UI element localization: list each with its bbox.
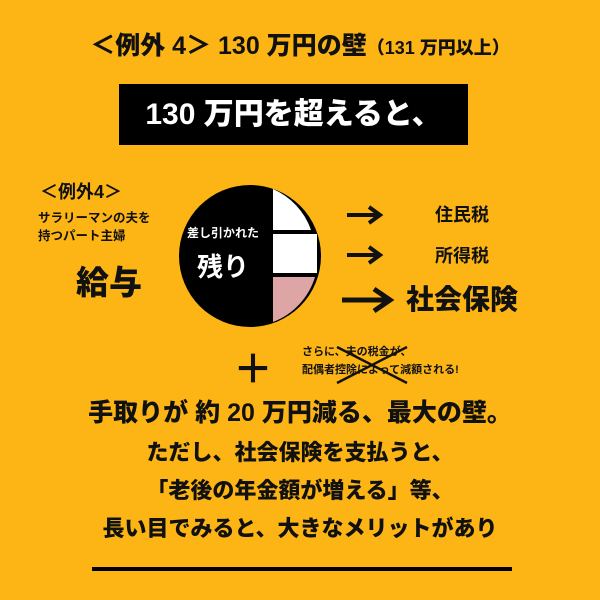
arrows and taxes (342, 205, 518, 315)
arrow 1 (347, 205, 384, 225)
text: housewife: サラリーマンの夫を (38, 211, 151, 225)
text: income tax: 所得税 (435, 246, 489, 266)
label: exception: ＜例外4＞ (40, 182, 122, 202)
conclusion text: 長い目でみると、大きなメリットがあり (102, 516, 498, 541)
arrow 2 (347, 245, 384, 265)
plus: ＋ (233, 348, 273, 392)
banner: 130 万円を超えると、 (145, 98, 442, 131)
note with cross: さらに、夫の税金が、 (302, 346, 411, 358)
note with cross (302, 345, 459, 384)
note with cross: 配偶者控除によって減額される! (302, 364, 459, 376)
pie chart: 差し引かれた (187, 225, 259, 240)
text: housewife: 持つパート主婦 (38, 229, 126, 243)
text: housewife (38, 211, 151, 243)
underline (92, 567, 512, 571)
text: resident tax: 住民税 (435, 205, 489, 225)
text: salary: 給与 (76, 264, 142, 301)
conclusion text (88, 398, 512, 541)
conclusion text: ただし、社会保険を支払うと、 (146, 440, 454, 465)
pie chart (179, 185, 321, 327)
banner (119, 84, 468, 145)
conclusion text: 手取りが 約 20 万円減る、最大の壁。 (88, 399, 512, 427)
conclusion text: 「老後の年金額が増える」等、 (146, 478, 454, 503)
title: ＜例外 4＞ 130 万円の壁（131 万円以上） (90, 32, 510, 60)
arrow 3 (342, 287, 394, 313)
pie chart: 残り (197, 252, 249, 282)
text: social insurance: 社会保険 (406, 284, 518, 315)
